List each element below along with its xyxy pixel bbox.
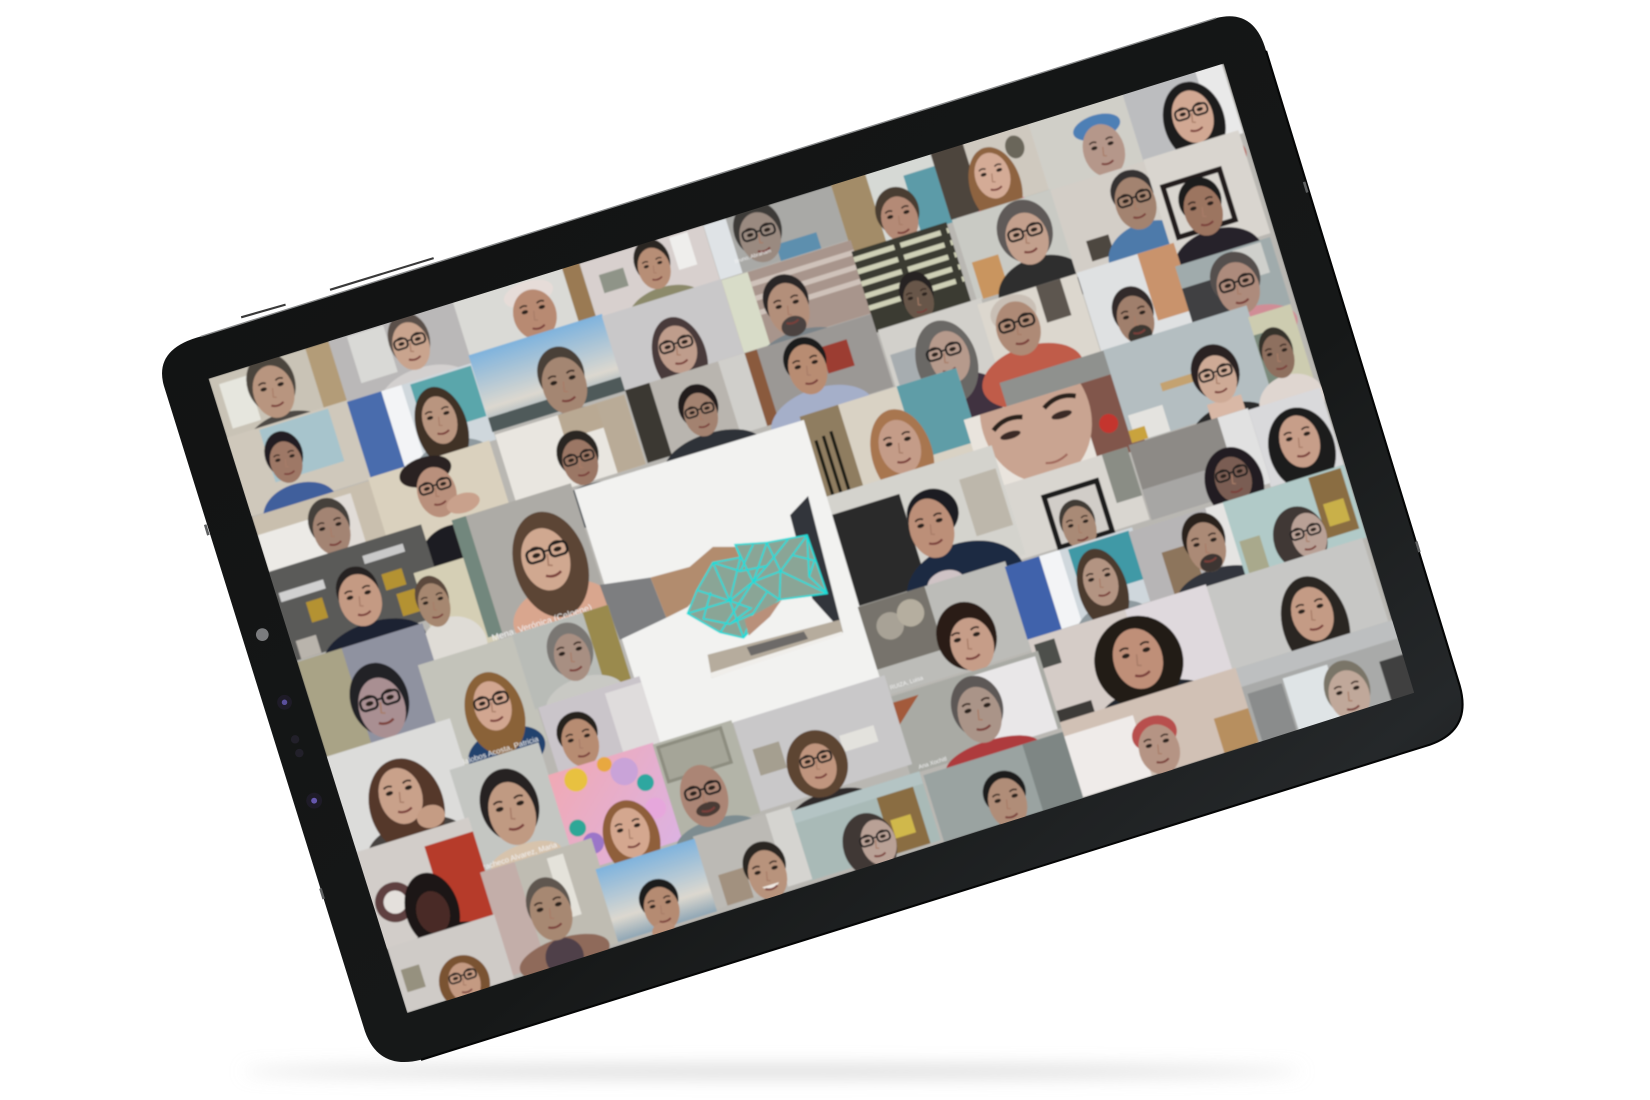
video tile: woman with painting [227, 400, 370, 517]
video tile: bearded man with orange curtain [1076, 242, 1193, 352]
video tile: person with headset [951, 190, 1084, 300]
video tile: dark-haired woman with red door [355, 817, 500, 983]
video tile: woman with long dark hair [1205, 538, 1389, 691]
name label: Mena Veronica: Mena, Verónica (Celoene) [491, 602, 593, 643]
panel: handshake image [574, 420, 881, 746]
video tile: woman by window [208, 342, 347, 438]
video tile: grey band partial person [999, 350, 1111, 407]
video tile: woman in shadow [1129, 408, 1273, 526]
video tile: bottom man [923, 732, 1083, 842]
video tile: bald man with glasses [653, 720, 761, 863]
video tile: man in white shirt at right [1248, 304, 1326, 407]
video tile: man in light blue shirt [744, 314, 894, 430]
video tile: older woman on grey wall [512, 605, 631, 734]
name label: Villalobos Patricia: Villalobos Acosta, Patricia [454, 734, 540, 769]
video tile: woman with blue curtain [346, 363, 496, 478]
video tile: man in khaki shirt [579, 225, 720, 316]
video tile: young man black shirt [1144, 130, 1270, 266]
video tile: woman with glasses and pink shirt [1174, 237, 1298, 324]
video tile: smiling man [693, 806, 823, 940]
video tile: man framed in mirror [1004, 446, 1150, 560]
tablet body [162, 16, 1463, 1062]
video tile: woman red headband [1060, 668, 1259, 822]
video tile: woman with curly hair [1248, 389, 1344, 488]
video tile: man in cockpit background [269, 524, 435, 661]
video tile: man with dark stripes background [850, 222, 972, 333]
video tile: close-up woman face [962, 374, 1146, 486]
video tile: Pacheco Alvarez with headset [450, 742, 570, 885]
video tile: woman with cabinet [1223, 465, 1367, 608]
video tile: man in white cap [452, 264, 596, 356]
video tile: man in cap with round glasses [368, 440, 509, 568]
video tile: woman with thick glasses [877, 299, 1004, 418]
video tile: man in white shirt [400, 555, 499, 687]
name label: Joel Maldonado: Joel Maldonado [1157, 596, 1198, 614]
video tile: Ruiz Luisa woman with bob [858, 561, 1033, 717]
video tile: curly woman with glasses bottom corner [387, 914, 514, 1016]
name label: Pacheco Alvarez: Pacheco Alvarez, Maria [479, 840, 559, 872]
video tile: man in navy t-shirt [826, 444, 1023, 607]
video tile: man with glasses and shelves [328, 302, 458, 402]
panel: video grid screen [208, 62, 1416, 1016]
video tile: woman glasses white top [1103, 305, 1268, 444]
name label: Ana Xochitl: Ana Xochitl [918, 756, 948, 771]
video tile: man in dark hoodie [624, 354, 768, 464]
video tile: bearded man with blinds [722, 240, 872, 353]
name label: Ruiz Luisa: RUIZA, Luisa [889, 675, 925, 692]
video tile: woman in tank top [480, 838, 623, 989]
video tile: man in blue cap [1028, 94, 1144, 190]
video tile: man with sky and hand on chin [595, 839, 717, 968]
video tile: woman on pink balloon background [548, 742, 684, 900]
video tile: woman smiling top right [1123, 64, 1248, 158]
video tile: man in front of sea view [468, 314, 626, 433]
video tile: woman with beams and lockers [799, 368, 974, 497]
video tile: Joel Maldonado [1129, 500, 1267, 621]
video tile: smiling woman curly black hair [1028, 585, 1232, 742]
video tile: woman with glasses purple top [601, 280, 744, 391]
video tile: Ana Xochitl [886, 651, 1062, 788]
video tile: man in red polo [978, 273, 1100, 408]
video tile: woman hand on chin [325, 718, 480, 879]
video tile: man in red shirt [529, 676, 660, 809]
video tile: woman with wooden cabinet [788, 771, 941, 884]
video tile: woman glasses headset [297, 623, 452, 799]
video tile: man with lockers [830, 154, 956, 252]
video tile: Bruno Abraham [703, 185, 850, 280]
icon: laptop base [708, 620, 843, 678]
camera sensors [256, 628, 322, 809]
video tile: Mena Veronica [452, 483, 621, 659]
video tile: man at curtained window [495, 394, 646, 537]
video tile: woman with arched window [1233, 620, 1416, 762]
icon: teal mesh digital hand [688, 535, 827, 638]
icon: sleeve [600, 578, 666, 640]
video tile: woman in pink stripes [930, 124, 1048, 220]
ground shadow [243, 1066, 1301, 1077]
icon: fingers [745, 600, 782, 636]
name label: Bruno Abraham: Bruno, Abraham [734, 248, 773, 265]
icon: laptop screen [790, 496, 843, 632]
video tile: Villalobos Patricia [418, 635, 552, 786]
video tile: woman blue curtain repeat [1005, 527, 1159, 661]
video tile: woman curly hair glasses [733, 675, 912, 837]
video tile: man at window thinking [252, 482, 386, 572]
illustration: tablet showing video conference [162, 16, 1464, 1084]
video tile: man in blue shirt [1052, 164, 1170, 278]
icon: real hand [650, 547, 744, 618]
